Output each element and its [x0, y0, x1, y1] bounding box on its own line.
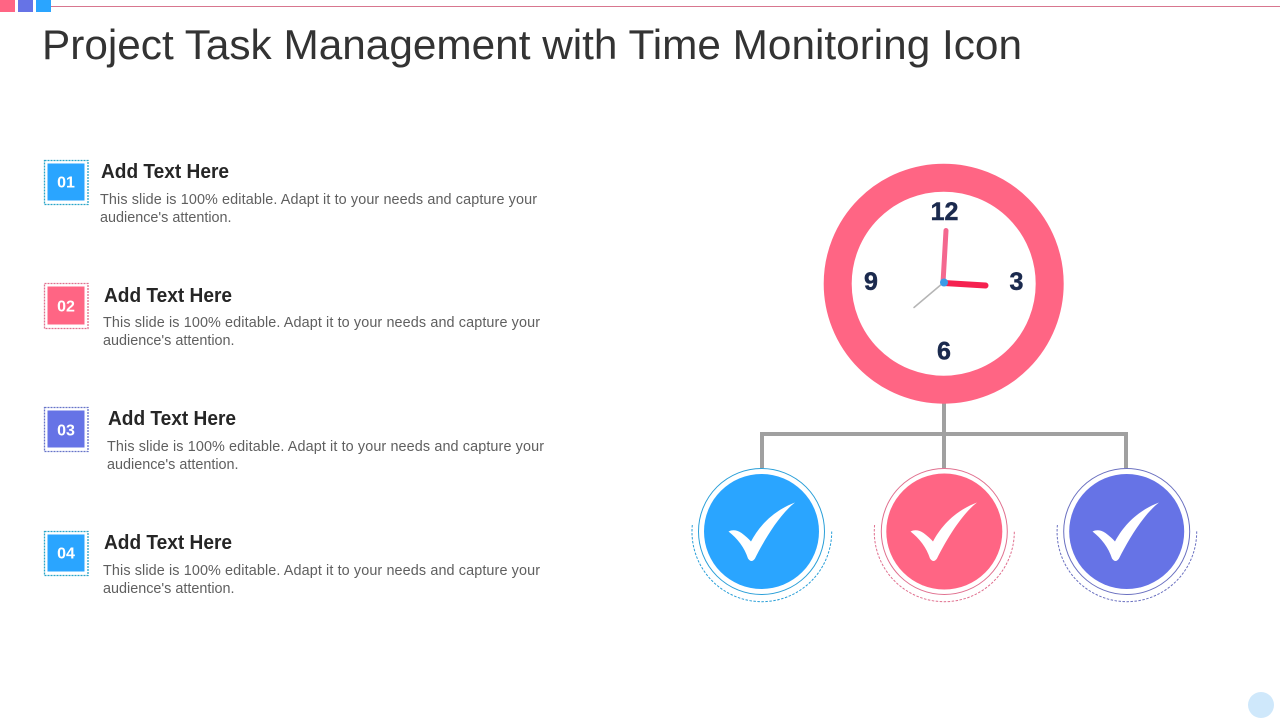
connector lines — [762, 403, 1126, 468]
title: Project Task Management with Time Monitoring Icon — [42, 21, 1022, 68]
badge 02 — [44, 284, 88, 328]
clock numerals: 6 — [937, 338, 951, 366]
clock hands — [914, 230, 986, 308]
clock icon — [838, 178, 1050, 390]
description 01: audience's attention. — [100, 210, 232, 226]
list item 04 — [44, 532, 540, 597]
list item 02 — [44, 284, 540, 349]
check badge: pink — [874, 468, 1014, 602]
badge 04 — [44, 532, 88, 576]
description 01: This slide is 100% editable. Adapt it to your needs and capture your — [100, 192, 537, 208]
clock numerals: 9 — [864, 268, 878, 296]
description 02: audience's attention. — [103, 333, 235, 349]
clock numerals: 3 — [1010, 268, 1023, 296]
heading 01: Add Text Here — [101, 161, 229, 183]
heading 03: Add Text Here — [108, 408, 236, 430]
badge 03 — [44, 408, 88, 452]
description 02: This slide is 100% editable. Adapt it to your needs and capture your — [103, 315, 540, 331]
top accent bar — [0, 0, 1280, 12]
badge 01: 01 — [57, 174, 75, 192]
badge 01 — [44, 160, 88, 204]
list item 01 — [44, 160, 537, 226]
check badge: blue — [692, 468, 832, 602]
description 04: audience's attention. — [103, 581, 235, 597]
clock ring — [838, 178, 1050, 390]
badge 04: 04 — [57, 546, 75, 562]
description 04: This slide is 100% editable. Adapt it to your needs and capture your — [103, 563, 540, 579]
clock numerals: 12 — [931, 198, 958, 226]
heading 02: Add Text Here — [104, 285, 232, 307]
clock numerals — [864, 198, 1023, 366]
badge 02: 02 — [57, 298, 75, 316]
list item 03 — [44, 408, 544, 473]
check badge: purple — [1057, 468, 1197, 602]
corner dot — [1248, 692, 1274, 718]
badge 03: 03 — [57, 422, 75, 440]
description 03: audience's attention. — [107, 457, 239, 473]
description 03: This slide is 100% editable. Adapt it to your needs and capture your — [107, 439, 544, 455]
heading 04: Add Text Here — [104, 532, 232, 554]
